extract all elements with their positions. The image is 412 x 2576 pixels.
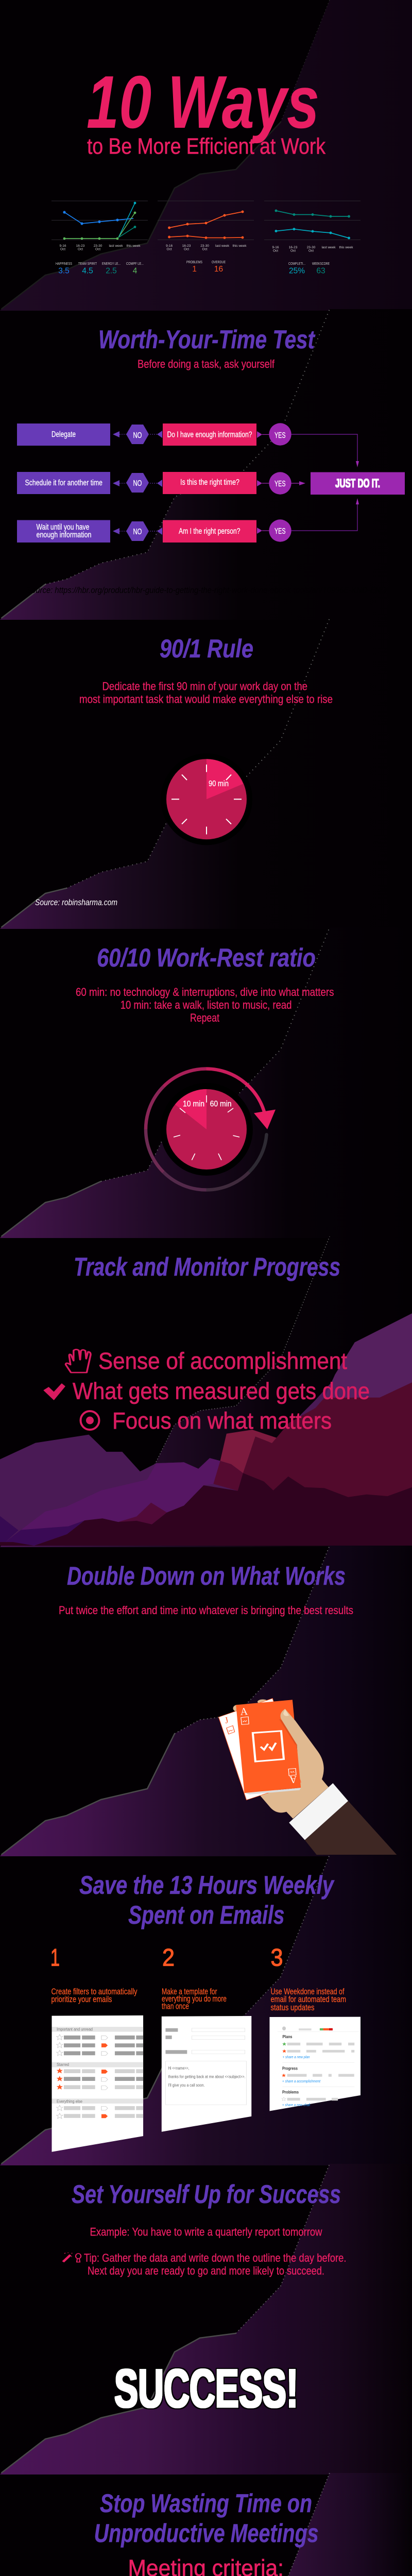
chart: team mood [52, 201, 148, 275]
chart: completion and week score: WEEKSCORE [312, 261, 330, 266]
chart: problems and overdue: PROBLEMS [186, 260, 202, 264]
heading: 60/10 Work-Rest ratio [97, 943, 316, 972]
chart: team mood: Oct [95, 247, 100, 251]
source note: Source: robinsharma.com [35, 897, 117, 907]
card: email template: thanks for getting back at me about <<subject>>. [168, 2074, 245, 2079]
chart: problems and overdue: Oct [202, 247, 208, 251]
chart: team mood: HAPPINESS [56, 261, 72, 266]
cycle arrow [146, 1069, 276, 1190]
section: set yourself up for success [0, 2164, 412, 2475]
description: 10 min: take a walk, listen to music, read [121, 998, 291, 1011]
row: enough information: Do I have enough information? [167, 431, 252, 439]
chart: problems and overdue: 1 [192, 265, 197, 274]
tip 3 text: status updates [271, 2003, 314, 2012]
tip 1 text [50, 1943, 138, 2004]
row: right time: YES [274, 480, 285, 488]
chart: team mood: TEAM SPIRIT [78, 261, 97, 266]
success headline: SUCCESS! [114, 2359, 298, 2419]
chart: team mood: 3.5 [58, 266, 70, 275]
description [79, 680, 333, 706]
icon: target [80, 1411, 99, 1430]
chart: completion and week score: this week [339, 246, 353, 249]
chart: problems and overdue: 16 [214, 265, 223, 274]
chart: team mood: 23-30 [94, 244, 102, 248]
chart: completion and week score: COMPLETI... [288, 261, 305, 266]
tip 1 text: Create filters to automatically [52, 1987, 138, 1996]
card: email template: I'll give you a call soon. [168, 2083, 205, 2088]
clock: 90 minutes: 90 min [209, 779, 229, 788]
row: right time: Is this the right time? [180, 478, 239, 487]
chart: team mood: last week [109, 244, 123, 248]
benefit: accomplishment: Sense of accomplishment [98, 1348, 347, 1374]
row: enough information [17, 423, 291, 446]
chart: completion and week score: Oct [273, 249, 278, 252]
chart: problems and overdue: Oct [167, 247, 172, 251]
icon: wand and bulb [63, 2252, 81, 2262]
heading: 90/1 Rule [160, 634, 253, 663]
row: right person: Wait until you have [36, 523, 90, 532]
tip 3 text: Use Weekdone instead of [271, 1987, 345, 1996]
tip text [84, 2251, 346, 2277]
title: 10 Ways [87, 60, 319, 144]
tip 2 text [162, 1943, 227, 2011]
card: weekdone status: + share a accomplishment [282, 2080, 321, 2083]
heading: Worth-Your-Time Test [98, 325, 316, 354]
chart: team mood: 4 [133, 266, 138, 275]
chart: team mood: 2.5 [106, 266, 117, 275]
chart: completion and week score: 23-30 [307, 246, 316, 249]
card: weekdone status: + share a new chall [282, 2104, 310, 2107]
row: right person: Am I the right person? [179, 527, 241, 536]
icon: check [44, 1384, 65, 1400]
subtitle: to Be More Efficient at Work [87, 134, 326, 159]
tip 2 text: everything you do more [162, 1994, 227, 2004]
row: enough information: YES [274, 431, 285, 440]
chart: problems and overdue [158, 201, 254, 274]
row: right person: enough information [36, 531, 92, 539]
subheading: Before doing a task, ask yourself [138, 358, 275, 370]
chart: completion and week score: Oct [290, 249, 296, 252]
chart: problems and overdue: Oct [184, 247, 189, 251]
section: emails [0, 1855, 412, 2165]
tip 2 text: Make a template for [162, 1987, 217, 1996]
card: email filters: Starred [57, 2062, 69, 2067]
section: track and monitor progress [0, 1236, 412, 1547]
benefit: measured: What gets measured gets done [73, 1378, 370, 1404]
card: weekdone status: Progress [282, 2066, 298, 2071]
chart: team mood: 16-23 [76, 244, 85, 248]
row: right person: YES [274, 527, 285, 536]
clock: 60/10: 60 min [210, 1099, 232, 1109]
icon: hand [66, 1349, 91, 1372]
card: email filters: Important and unread [57, 2027, 93, 2032]
arrows to just do it [291, 434, 359, 531]
description [76, 986, 334, 1024]
row: right time: NO [133, 479, 142, 488]
chart: team mood: COMPF LE... [126, 261, 144, 266]
chart hills [0, 1313, 412, 1546]
row: right person: NO [133, 528, 142, 536]
heading: Unproductive Meetings [94, 2519, 319, 2548]
description: 60 min: no technology & interruptions, dive into what matters [76, 986, 334, 998]
row: enough information: Delegate [52, 430, 76, 439]
heading [94, 2489, 319, 2548]
card: email filters [52, 2015, 143, 2152]
chart: problems and overdue: 9-16 [166, 244, 173, 248]
chart: completion and week score: last week [321, 246, 336, 249]
card: weekdone status: Problems [282, 2090, 299, 2095]
row: right person [17, 519, 291, 543]
chart: completion and week score: Oct [308, 249, 314, 252]
flowchart [17, 423, 405, 543]
chart: team mood: 9-16 [59, 244, 66, 248]
illustration: hand holding cards: A [240, 1706, 248, 1718]
chart: completion and week score: 25% [289, 266, 305, 275]
description: Repeat [190, 1011, 219, 1024]
card: weekdone status [269, 2017, 360, 2111]
card: email template [162, 2016, 251, 2132]
card: weekdone status: + share a new plan [282, 2056, 310, 2059]
example text: Example: You have to write a quarterly report tomorrow [90, 2226, 322, 2239]
tip 2 text: 2 [162, 1943, 175, 1971]
section: intro [0, 0, 412, 311]
card: weekdone status: Plans [282, 2035, 293, 2039]
section: double down [0, 1546, 412, 1856]
card: email template: Hi <<name>>, [168, 2066, 190, 2071]
tip 3 text: 3 [271, 1943, 283, 1971]
clock: 60/10 [160, 1083, 253, 1176]
heading: Save the 13 Hours Weekly [79, 1871, 335, 1900]
benefit: focus: Focus on what matters [112, 1408, 332, 1434]
tip 3 text: email for automated team [271, 1994, 346, 2004]
box: just do it: JUST DO IT. [335, 477, 380, 490]
clock: 60/10: 10 min [183, 1099, 204, 1109]
heading: Spent on Emails [128, 1901, 284, 1929]
box: just do it [311, 472, 405, 495]
chart: team mood: ENERGY LE... [102, 261, 121, 266]
tip text: Next day you are ready to go and more likely to succeed. [88, 2264, 324, 2277]
chart: completion and week score: 9-16 [272, 246, 279, 249]
chart: completion and week score: 16-23 [289, 246, 298, 249]
description: Put twice the effort and time into whatever is bringing the best results [59, 1604, 353, 1617]
chart: completion and week score: 63 [316, 266, 325, 275]
chart: problems and overdue: this week [232, 244, 247, 248]
heading: Set Yourself Up for Success [72, 2180, 341, 2209]
section: 60/10 work-rest ratio [0, 927, 412, 1238]
illustration: hand holding cards: A [289, 1773, 297, 1785]
section: meetings [0, 2473, 412, 2576]
chart: team mood: this week [126, 244, 141, 248]
chart: completion and week score [264, 201, 360, 275]
chart: problems and overdue: 16-23 [182, 244, 191, 248]
illustration: hand holding cards [218, 1699, 397, 1855]
section: worth-your-time test [0, 309, 412, 620]
card: email filters: Everything else [57, 2099, 82, 2104]
row: right time [17, 472, 291, 495]
tip 1 text: prioritize your emails [52, 1994, 112, 2004]
tip 2 text: than once [162, 2002, 189, 2011]
heading: Stop Wasting Time on [100, 2489, 312, 2518]
illustration: hand holding cards: J [224, 1715, 230, 1725]
chart: problems and overdue: 23-30 [200, 244, 209, 248]
row: right time: Schedule it for another time [25, 479, 102, 487]
heading: Track and Monitor Progress [74, 1252, 340, 1281]
tip 1 text: 1 [50, 1943, 60, 1971]
row: enough information: NO [133, 431, 142, 440]
chart: team mood: 4.5 [82, 266, 93, 275]
section: 90/1 rule [0, 618, 412, 929]
chart: problems and overdue: last week [215, 244, 230, 248]
chart: team mood: Oct [60, 247, 65, 251]
description: Dedicate the first 90 min of your work day on the [102, 680, 307, 693]
chart: problems and overdue: OVERDUE [212, 260, 226, 264]
heading [79, 1871, 335, 1929]
tip 3 text [271, 1943, 346, 2012]
tip text: Tip: Gather the data and write down the outline the day before. [84, 2251, 346, 2264]
clock: 90 minutes [161, 753, 252, 845]
chart: team mood: Oct [78, 247, 83, 251]
description: most important task that would make everything else to rise [79, 693, 333, 706]
